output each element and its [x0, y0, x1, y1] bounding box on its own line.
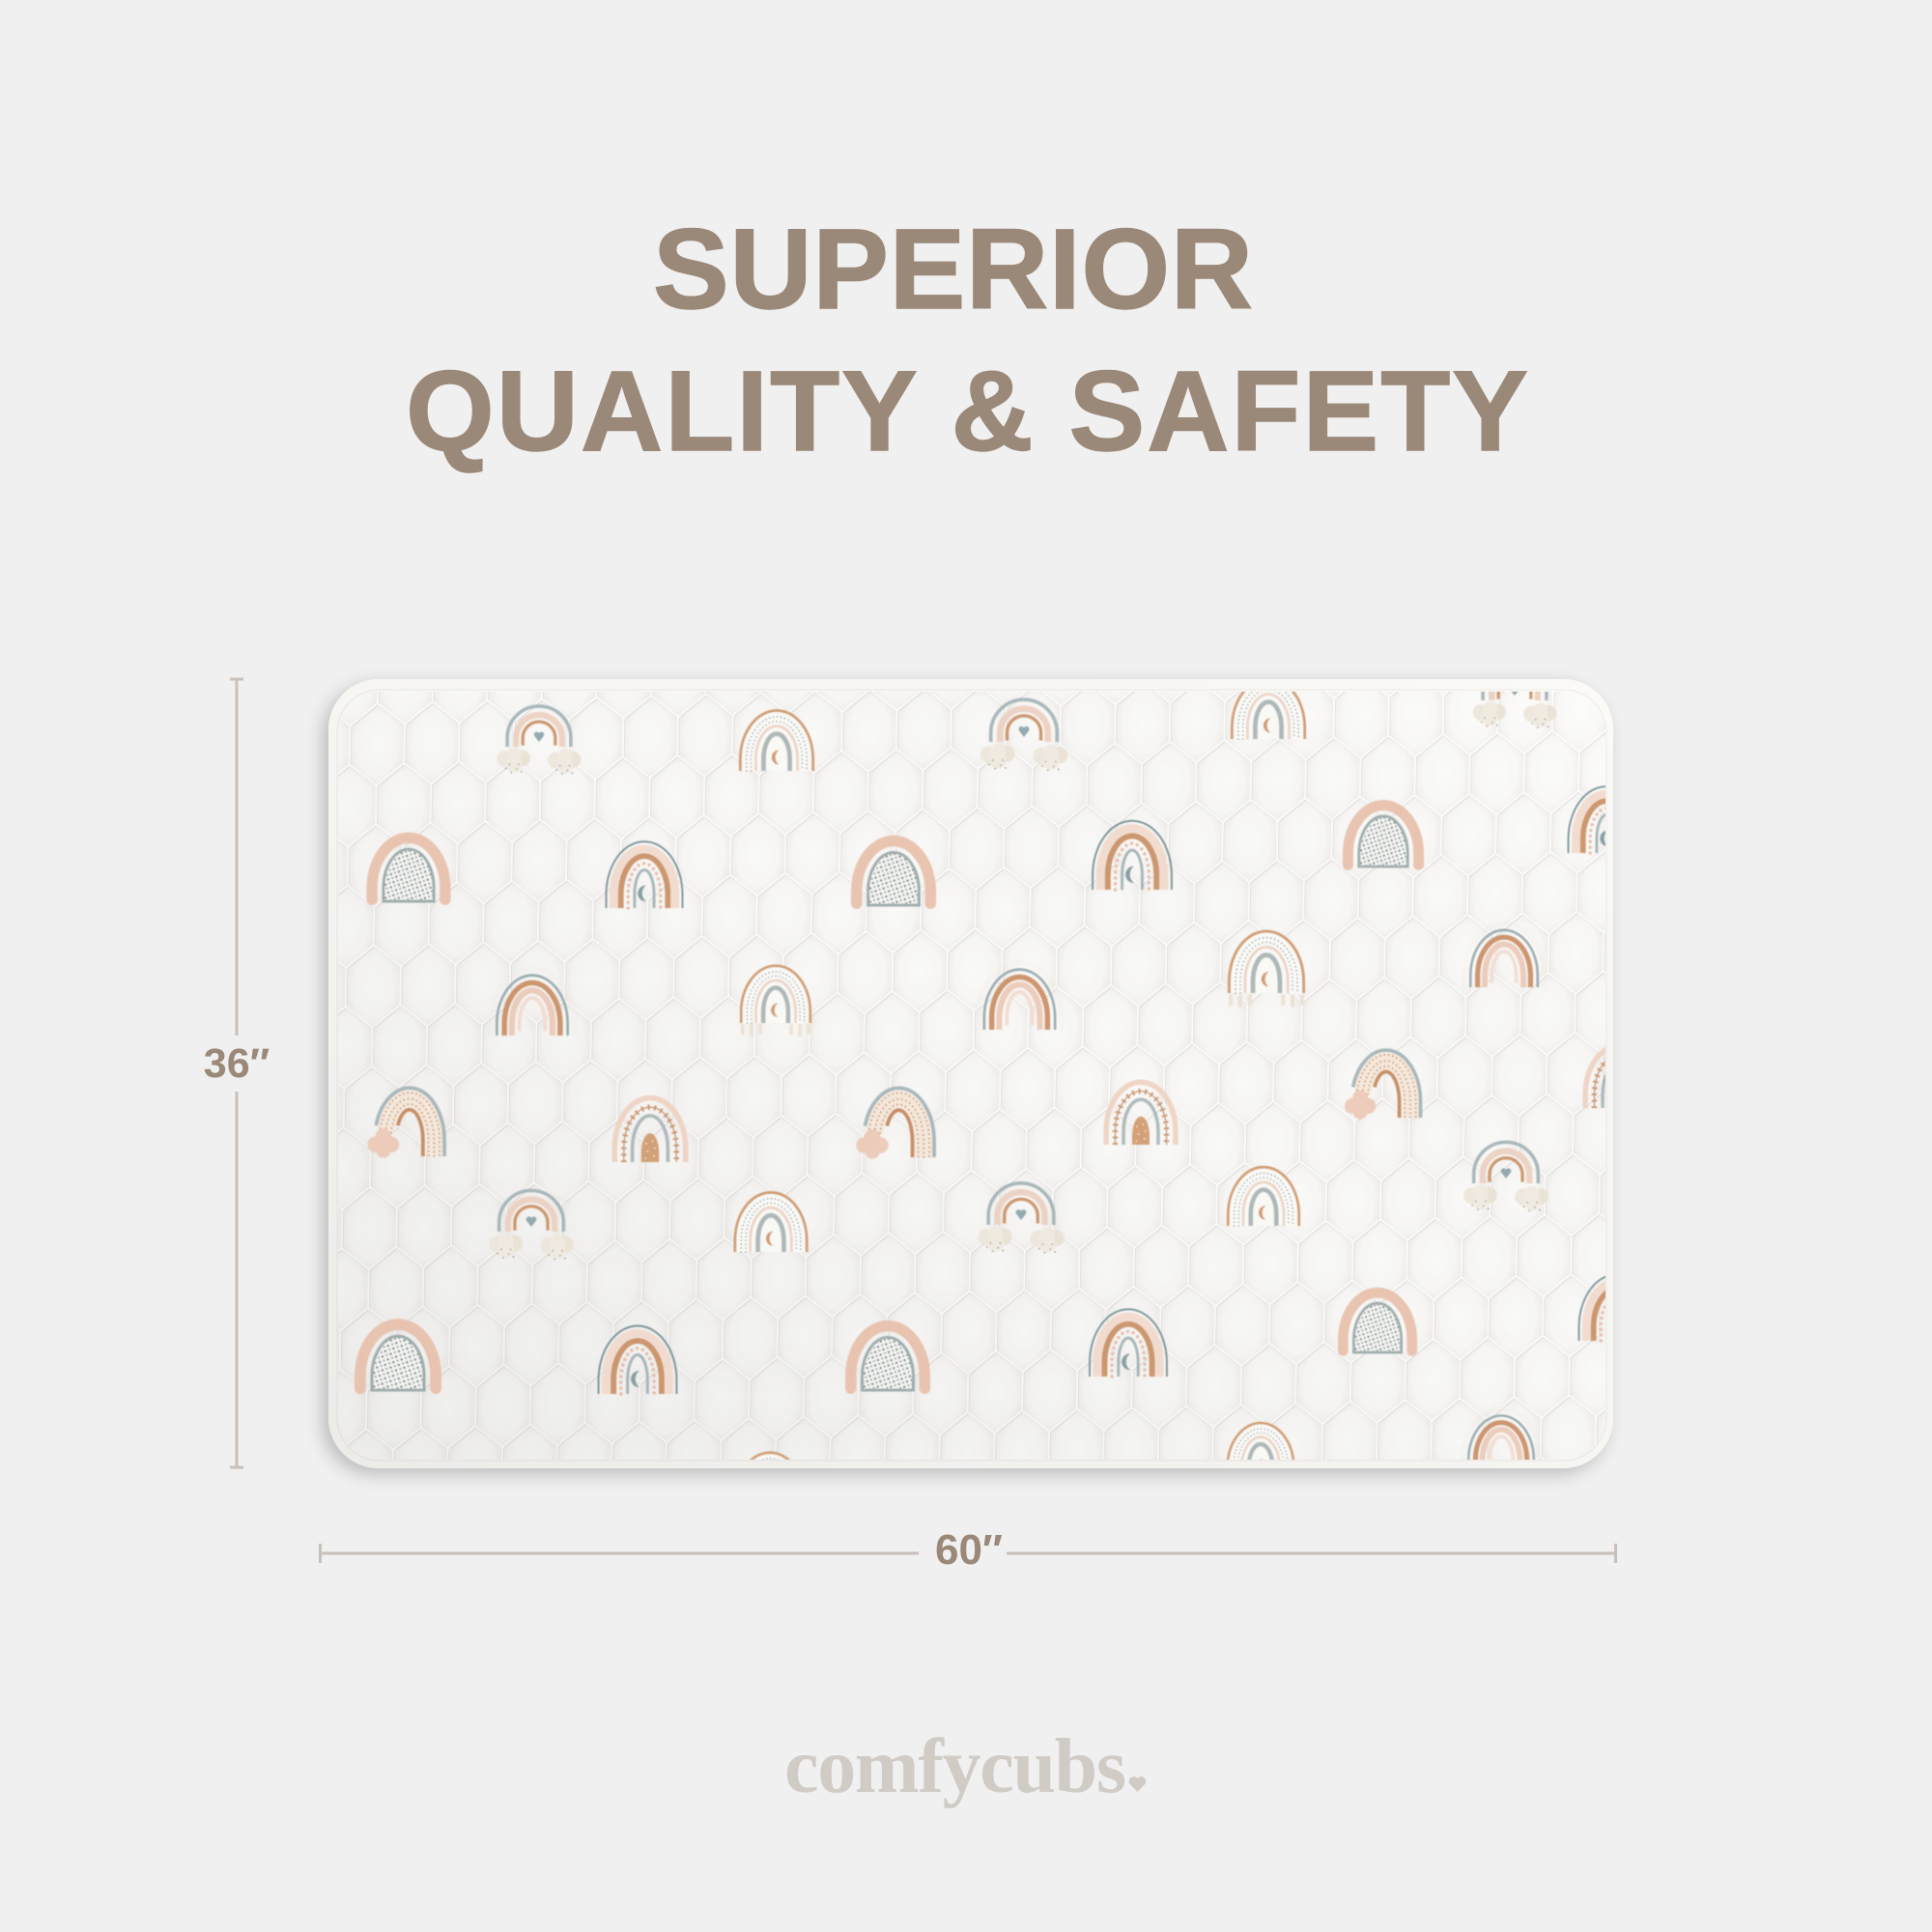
rainbow: multi band cut by right edge — [1579, 1274, 1655, 1341]
panel: quilted play mat — [328, 660, 1655, 1510]
rainbow: pink cloud, row 4 — [1345, 1050, 1421, 1120]
rainbow: speckled pink, row 6 — [1343, 1293, 1412, 1352]
rainbow: leaf arch, row 4 — [614, 1098, 686, 1162]
rainbow: dotted moon, row 5 — [735, 1192, 807, 1252]
dimension: width 60 inches — [321, 1526, 1615, 1574]
rainbow: sun rays, row 3 — [490, 969, 575, 1036]
rainbow: clouds, row 5 — [489, 1190, 574, 1260]
rainbow: clouds, row 1 — [497, 706, 581, 775]
rainbow: speckled pink, row 2 — [857, 841, 930, 905]
rainbow: speckled pink, row 2 — [1348, 806, 1419, 867]
width ruler — [321, 1544, 1615, 1563]
rainbow: fringed dotted, row 3 — [741, 966, 810, 1037]
title: SUPERIOR — [653, 206, 1253, 333]
title — [406, 206, 1528, 475]
rainbow: sun rays, row 3 — [1464, 923, 1544, 987]
rainbow: speckled pink, row 6 — [851, 1326, 924, 1390]
logo: comfycubs: comfycubs — [784, 1724, 1126, 1809]
title: QUALITY & SAFETY — [406, 348, 1528, 475]
rainbow: dotted moon, row 1 — [740, 711, 813, 771]
rainbow: leaf arch, row 4 — [1106, 1082, 1176, 1145]
rainbow: multi band moon, row 6 — [599, 1325, 676, 1394]
icon: logo heart — [1129, 1776, 1146, 1792]
inner seam of piping — [337, 690, 1606, 1461]
rainbow: pink cloud, row 4 — [856, 1088, 934, 1159]
rainbow: multi band moon, row 2 — [1093, 821, 1172, 890]
rainbow: speckled pink, row 2 — [372, 838, 445, 901]
rainbow: sun rays, row 3 — [978, 963, 1062, 1030]
rainbow: dotted moon cut by top edge — [1230, 692, 1307, 740]
rainbow: multi band cut by right edge — [1567, 784, 1605, 856]
rainbow: sun rays cut by bottom edge — [1463, 1409, 1540, 1471]
rainbow: multi band moon, row 6 — [1090, 1309, 1167, 1377]
rainbow: dotted moon, row 5 — [1228, 1167, 1299, 1226]
rainbow: fringed dotted, row 3 — [1229, 931, 1304, 1008]
rainbow: clouds, row 5 — [978, 1183, 1065, 1254]
rainbow print — [354, 692, 1605, 1460]
mat lighting tone — [328, 679, 1613, 1468]
rainbow: multi band moon, row 2 — [607, 841, 682, 908]
dimension: height 36 inches — [204, 679, 270, 1467]
rainbow: clouds cut by top edge — [1472, 692, 1557, 728]
width label: 60″ — [935, 1526, 1003, 1574]
rainbow: cut by bottom edge — [735, 1453, 805, 1510]
rainbow: clouds, row 5 — [1463, 1142, 1548, 1211]
mat base with piped edge — [328, 679, 1613, 1468]
rainbow: dotted moon cut by bottom edge — [1228, 1423, 1293, 1478]
rainbow: pink cloud, row 4 — [367, 1088, 444, 1158]
quilted hexagon stitching — [338, 692, 1605, 1460]
rainbow: leaf arch cut by right edge — [1582, 1046, 1605, 1109]
height ruler — [230, 679, 243, 1467]
rainbow: clouds, row 1 — [980, 699, 1067, 771]
height label: 36″ — [204, 1040, 270, 1087]
rainbow: speckled pink, row 6 — [360, 1324, 436, 1390]
